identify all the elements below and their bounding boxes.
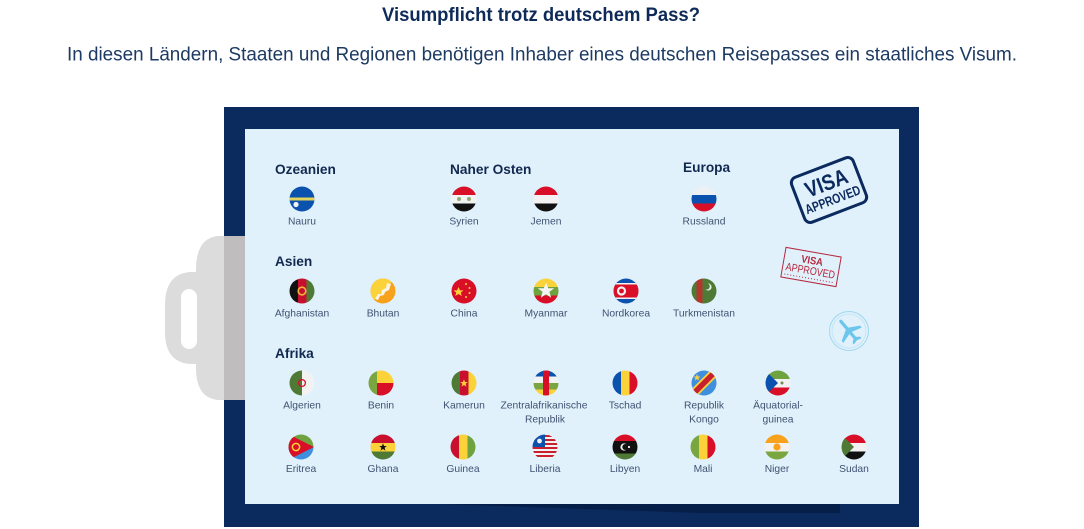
Zentralafrikanische Republik: Zentralafrikanische [500, 400, 588, 412]
Nauru: Nauru [288, 216, 316, 228]
Russland [683, 186, 725, 224]
China [451, 278, 478, 316]
Eritrea [286, 434, 316, 472]
Benin [368, 370, 394, 408]
Kamerun [444, 370, 484, 408]
Myanmar [525, 278, 568, 320]
Liberia: Liberia [530, 464, 561, 475]
Republik Kongo [684, 370, 725, 426]
Bhutan [368, 278, 399, 316]
Kamerun: Kamerun [443, 400, 485, 412]
Turkmenistan: Turkmenistan [673, 308, 735, 320]
inner page [245, 129, 899, 504]
Tschad [609, 370, 641, 408]
Syrien [449, 186, 479, 228]
heading: Asien: Asien [275, 254, 312, 269]
Benin: Benin [368, 400, 394, 412]
Libyen [610, 434, 640, 475]
Nordkorea [602, 278, 650, 320]
Liberia [530, 434, 560, 472]
Turkmenistan [673, 278, 735, 320]
stamp: visa approved blue: APPROVED [803, 182, 863, 217]
stamp: visa approved red [781, 247, 841, 287]
Äquatorialguinea: guinea [763, 414, 794, 426]
Afghanistan: Afghanistan [275, 308, 329, 320]
stamp: visa approved blue [790, 156, 868, 224]
Jemen: Jemen [531, 216, 562, 228]
Libyen: Libyen [610, 464, 640, 475]
Russland: Russland [683, 216, 726, 228]
Bhutan: Bhutan [367, 308, 400, 320]
China: China [451, 308, 478, 320]
Nauru [288, 186, 316, 224]
Jemen [530, 186, 561, 224]
Republik Kongo: Kongo [689, 414, 719, 426]
Sudan [840, 434, 868, 472]
page shadow [440, 504, 840, 513]
heading: Naher Osten: Naher Osten [450, 162, 531, 177]
Zentralafrikanische Republik: Republik [525, 414, 566, 426]
Äquatorialguinea: Äquatorial- [753, 400, 803, 412]
Mali [690, 434, 716, 472]
Algerien [283, 370, 321, 412]
passport frame [224, 107, 919, 527]
icon: airplane [830, 312, 868, 350]
Myanmar: Myanmar [525, 308, 568, 320]
Sudan: Sudan [839, 464, 869, 475]
Eritrea: Eritrea [286, 464, 316, 475]
Ghana [368, 434, 398, 472]
heading: Europa: Europa [683, 160, 731, 175]
Republik Kongo: Republik [684, 400, 725, 412]
Guinea: Guinea [446, 464, 480, 475]
Niger [764, 434, 790, 475]
stamp: visa approved red: VISA [800, 253, 824, 269]
Mali: Mali [694, 464, 712, 475]
Afghanistan [275, 278, 329, 320]
Zentralafrikanische Republik [500, 370, 588, 426]
Algerien: Algerien [283, 400, 321, 412]
heading: Afrika: Afrika [275, 346, 314, 361]
Äquatorialguinea [753, 370, 803, 426]
luggage handle [165, 236, 245, 400]
Niger: Niger [765, 464, 790, 475]
stamp: visa approved blue: VISA [801, 163, 851, 203]
subtitle: In diesen Ländern, Staaten und Regionen benötigen Inhaber eines deutschen Reisepasses ein staatliches Visum. [67, 44, 1017, 66]
Guinea [446, 434, 480, 475]
title: Visumpflicht trotz deutschem Pass? [382, 5, 700, 26]
heading: Ozeanien: Ozeanien [275, 162, 336, 177]
Ghana: Ghana [368, 464, 399, 475]
stamp: visa approved red: APPROVED [785, 261, 836, 282]
Nordkorea: Nordkorea [602, 308, 650, 320]
Tschad: Tschad [609, 400, 642, 412]
Syrien: Syrien [449, 216, 479, 228]
